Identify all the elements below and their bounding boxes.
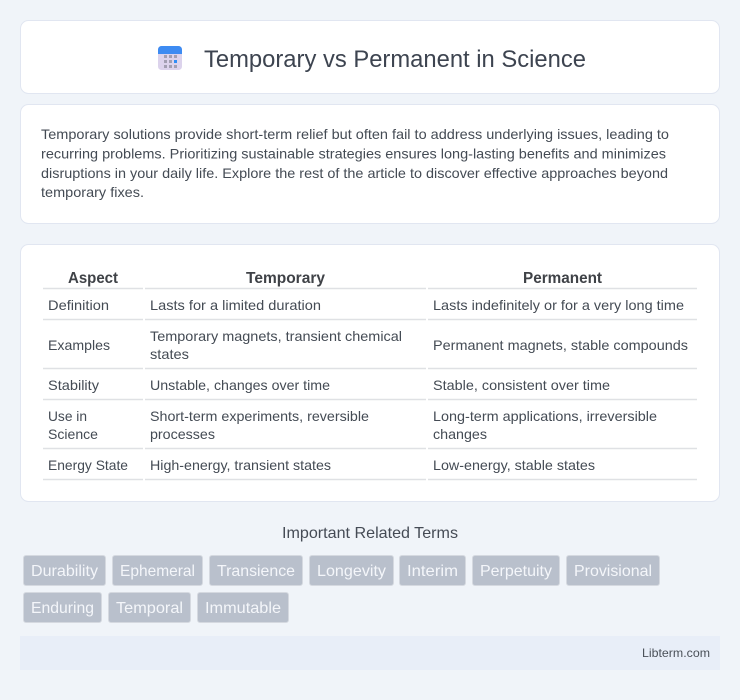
- row: definition: [43, 297, 697, 320]
- row: stability: Stable, consistent over time: [433, 377, 610, 393]
- tag: Perpetuity: [472, 556, 560, 586]
- tag: Durability: [24, 556, 106, 586]
- tag: Longevity: [310, 556, 394, 586]
- intro paragraph: Temporary solutions provide short-term relief but often fail to address underlying issues, leading to: [41, 126, 669, 142]
- row: use in science: Short-term experiments, reversible: [150, 408, 369, 424]
- row: energy state: High-energy, transient states: [150, 457, 331, 473]
- row: use in science: [43, 408, 697, 448]
- tag: Immutable: Immutable: [205, 600, 281, 617]
- row: examples: [43, 328, 697, 368]
- footer bar: [20, 636, 720, 670]
- row: stability: Unstable, changes over time: [150, 377, 330, 393]
- table header row: Temporary: [246, 270, 325, 287]
- tag: Durability: Durability: [31, 563, 98, 580]
- row: examples: Temporary magnets, transient chemical: [150, 328, 402, 344]
- row: use in science: Use in: [48, 408, 87, 424]
- row: examples: Permanent magnets, stable compounds: [433, 337, 688, 353]
- row: examples: Examples: [48, 337, 110, 353]
- panel: introduction: [20, 104, 720, 224]
- row: definition: Lasts for a limited duration: [150, 297, 321, 313]
- tag: Interim: Interim: [407, 563, 458, 580]
- panel: title header: [20, 20, 720, 94]
- intro paragraph: recurring problems. Prioritizing sustainable strategies ensures long-lasting benefits and minimizes: [41, 146, 666, 162]
- row: energy state: [43, 457, 697, 480]
- row: use in science: Science: [48, 426, 98, 442]
- title: Temporary vs Permanent in Science: [204, 46, 586, 73]
- tag: Provisional: Provisional: [574, 563, 652, 580]
- row: definition: Definition: [48, 297, 109, 313]
- row: use in science: Long-term applications, irreversible: [433, 408, 657, 424]
- panel: comparison table: [20, 244, 720, 502]
- tag: Enduring: [24, 592, 102, 622]
- intro paragraph: [41, 126, 669, 200]
- icon: calendar: [158, 46, 182, 70]
- footer credit: Libterm.com: [642, 646, 710, 660]
- table header row: Permanent: [523, 270, 603, 287]
- row: energy state: Low-energy, stable states: [433, 457, 595, 473]
- heading: related terms: Important Related Terms: [282, 525, 458, 542]
- intro paragraph: temporary fixes.: [41, 184, 144, 200]
- intro paragraph: disruptions in your daily life. Explore the rest of the article to discover effective approaches beyond: [41, 165, 668, 181]
- row: stability: Stability: [48, 377, 99, 393]
- row: energy state: Energy State: [48, 457, 128, 473]
- tag: Perpetuity: Perpetuity: [480, 563, 552, 580]
- row: examples: states: [150, 346, 189, 362]
- row: definition: Lasts indefinitely or for a very long time: [433, 297, 684, 313]
- tag: Immutable: [198, 592, 288, 622]
- related term tags: [24, 556, 660, 622]
- tag: Enduring: Enduring: [31, 600, 94, 617]
- tag: Interim: [400, 556, 466, 586]
- row: use in science: changes: [433, 426, 487, 442]
- tag: Transience: [210, 556, 302, 586]
- tag: Ephemeral: [112, 556, 202, 586]
- tag: Provisional: [566, 556, 660, 586]
- tag: Longevity: Longevity: [317, 563, 386, 580]
- tag: Temporal: Temporal: [116, 600, 183, 617]
- tag: Temporal: [108, 592, 190, 622]
- tag: Ephemeral: Ephemeral: [120, 563, 195, 580]
- table header row: Aspect: [68, 270, 119, 287]
- tag: Transience: Transience: [217, 563, 295, 580]
- row: use in science: processes: [150, 426, 215, 442]
- row: stability: [43, 377, 697, 400]
- table header row: [43, 270, 697, 288]
